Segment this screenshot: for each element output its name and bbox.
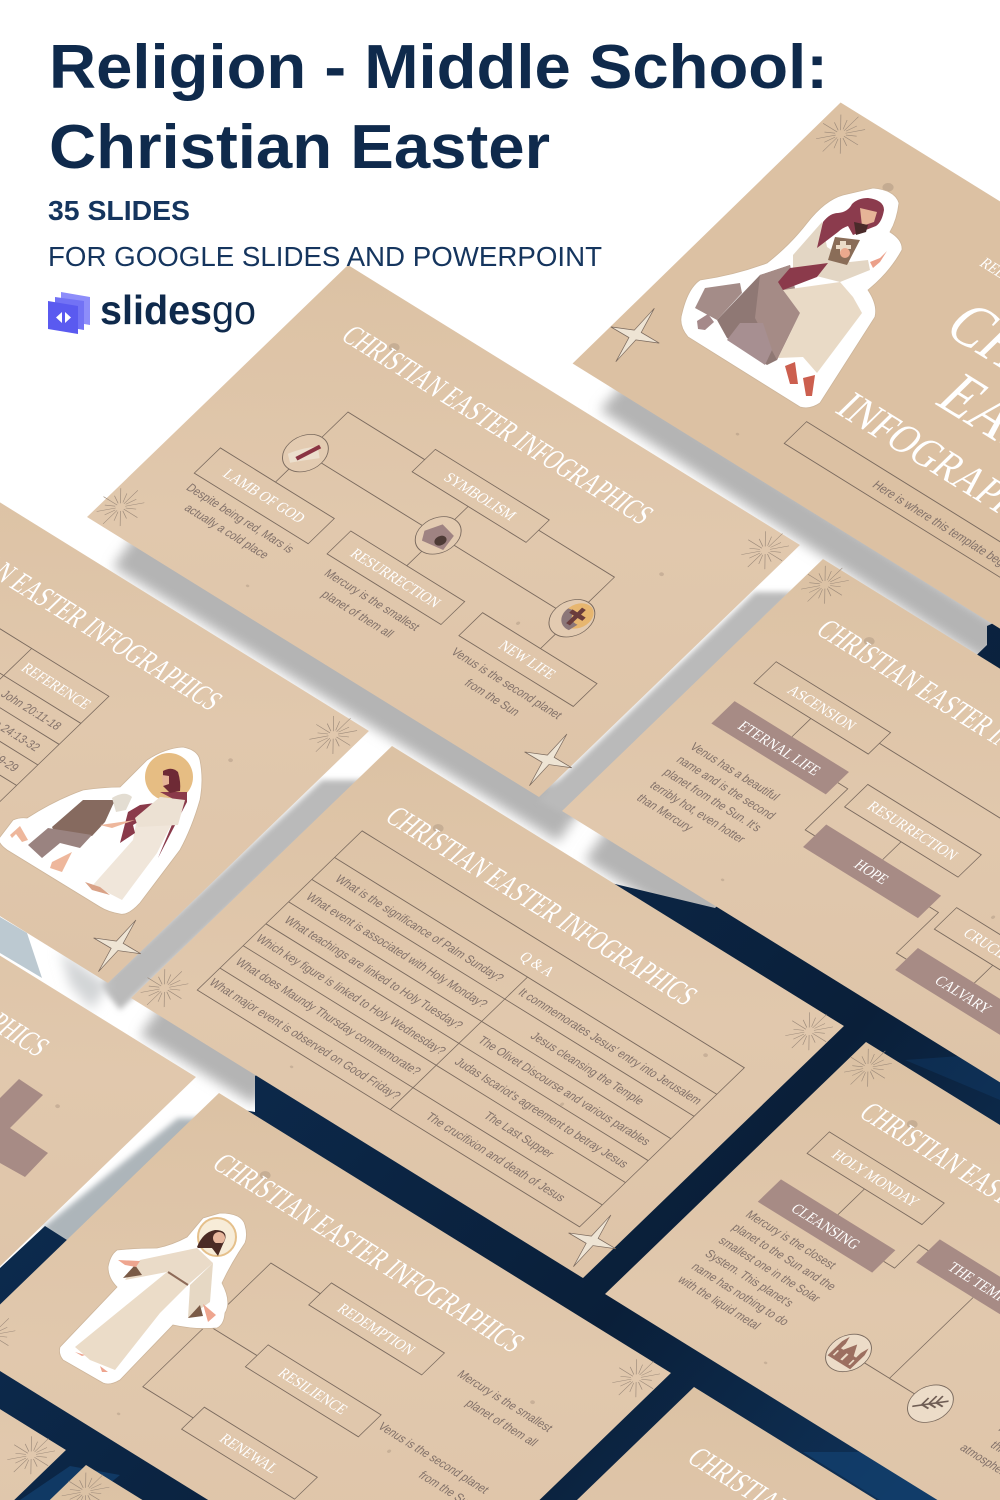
text: resilience: Venus is the second planet: [375, 1420, 492, 1497]
node: renewal: [182, 1407, 317, 1499]
title: CHRISTIAN EASTER INFOGRAPHICS: [334, 320, 661, 531]
table: The Olivet Discourse and various parables: [475, 1034, 653, 1148]
table: Which key figure is linked to Holy Wednesday?: [253, 932, 449, 1058]
text: eternal life: Venus has a beautiful: [687, 740, 782, 803]
title: Religion - Middle School:: [49, 33, 828, 102]
title: CHRISTIAN EASTER INFOGRAPHICS: [205, 1148, 532, 1359]
connectors: [274, 412, 614, 649]
sunburst: [86, 480, 155, 534]
text: lamb of god: actually a cold place: [181, 502, 272, 561]
text: cleansing: smallest one in the Solar: [715, 1234, 823, 1305]
text: cleansing: planet to the Sun and the: [729, 1221, 839, 1293]
sunburst: [602, 1351, 671, 1406]
icon: slidesgo logo: [48, 292, 90, 334]
text: lamb of god: Despite being red, Mars is: [183, 481, 297, 556]
slide: ascension tree: [562, 557, 1000, 1091]
node: resurrection: RESURRECTION: [346, 546, 444, 611]
slide: cover: [568, 100, 1000, 651]
cover text box: [784, 422, 1000, 611]
text: eternal life: name and is the second: [673, 754, 778, 822]
sticker: Jesus seated on rock: [681, 188, 902, 408]
node: symbolism: SYMBOLISM: [440, 470, 519, 524]
text: cleansing: [674, 1208, 852, 1345]
sunburst: [130, 961, 199, 1015]
slide: redemption tree: [0, 1091, 671, 1500]
text: eternal life: [634, 740, 792, 860]
star: [540, 1199, 644, 1283]
connectors: [755, 1189, 1000, 1394]
sunburst: [0, 1308, 26, 1362]
title: CHRISTIAN EASTER INFOGRAPHICS: [378, 801, 705, 1012]
table: What major event is observed on Good Friday?: [206, 976, 404, 1102]
sunburst: [731, 523, 800, 578]
connectors: [143, 1263, 321, 1418]
table: Judas Iscariot's agreement to betray Jesus: [451, 1056, 631, 1171]
text: cleansing: Mercury is the closest: [742, 1208, 840, 1272]
node: redemption: REDEMPTION: [333, 1301, 419, 1359]
text: eternal life: than Mercury: [634, 792, 696, 834]
icon: scroll: [273, 427, 338, 479]
table: What event is associated with Holy Monday?: [303, 891, 491, 1011]
big filled shape on left slide: [0, 1079, 48, 1177]
slide: reference table: [0, 450, 376, 988]
node: ascension: [754, 662, 891, 754]
sunburst: [805, 106, 876, 162]
cover title: [827, 281, 1000, 582]
sunburst: [775, 1004, 844, 1059]
table: The Last Supper: [480, 1110, 557, 1160]
node: redemption: [309, 1283, 444, 1375]
table: REFERENCE: [17, 661, 94, 713]
node: hope: [803, 825, 941, 918]
text: redemption: Mercury is the smallest: [454, 1368, 556, 1435]
text: cleansing: System. This planet's: [702, 1247, 797, 1310]
table: [0, 549, 109, 806]
icon: church: [816, 1327, 881, 1379]
slide: far bottom left: [0, 1170, 66, 1500]
node: resilience: RESILIENCE: [274, 1366, 351, 1418]
node: cleansing: CLEANSING: [787, 1201, 864, 1253]
sunburst: [299, 708, 368, 762]
node: resurrection: [845, 784, 981, 877]
node: resilience: [245, 1345, 381, 1437]
node: lamb of god: [194, 448, 334, 544]
node: eternal life: [711, 701, 849, 794]
node: resurrection: RESURRECTION: [863, 799, 961, 864]
slide: bottom centre right: [433, 1387, 1000, 1500]
table: It commemorates Jesus' entry into Jerusalem: [515, 986, 705, 1107]
slide count: 35 SLIDES: [48, 195, 190, 226]
table: Q & A: [515, 949, 558, 980]
text: right column: [957, 1415, 1000, 1481]
text: cleansing: name has nothing to do: [688, 1261, 792, 1329]
node: holy monday: [807, 1132, 944, 1225]
star: [582, 292, 689, 378]
node: ascension: ASCENSION: [783, 683, 859, 734]
text: new life: from the Sun: [461, 677, 523, 718]
logo wordmark: slidesgo: [100, 287, 256, 333]
sticker: Jesus with open arms: [59, 1213, 246, 1384]
slide: tiny bottom left: [0, 1464, 538, 1500]
text: resurrection: planet of them all: [318, 588, 396, 640]
icon: cross: [539, 592, 604, 644]
subtitle: FOR GOOGLE SLIDES AND POWERPOINT: [48, 241, 602, 272]
navy background region: [0, 620, 1000, 1500]
node: cleansing: [758, 1179, 895, 1273]
title line two: Christian Easter: [49, 113, 550, 182]
node: calvary: CALVARY: [931, 973, 995, 1017]
node: new life: [459, 613, 597, 706]
text: eternal life: terribly hot, even hotter: [647, 779, 748, 846]
node: resurrection: [327, 531, 465, 624]
node: holy monday: HOLY MONDAY: [827, 1147, 923, 1211]
sunburst: [834, 1040, 902, 1095]
icon: palm leaf: [898, 1378, 963, 1429]
star: [496, 718, 600, 802]
table: The crucifixion and death of Jesus: [422, 1110, 568, 1204]
table: What does Maundy Thursday commemorate?: [232, 956, 424, 1078]
table: [197, 831, 744, 1227]
node: crucifixion: [934, 908, 1000, 1000]
icon: tomb: [406, 510, 471, 561]
node: calvary: [895, 948, 1000, 1041]
text: new life: Venus is the second planet: [448, 646, 566, 722]
table: Jesus cleansing the Temple: [527, 1030, 647, 1108]
node: lamb of god: LAMB OF GOD: [219, 467, 309, 527]
node: the temple: [916, 1239, 1000, 1333]
star: [65, 904, 169, 988]
connectors: [696, 708, 1000, 1028]
sticker: Jesus healing kneeling man: [0, 747, 202, 914]
text: eternal life: planet from the Sun. It's: [660, 766, 765, 834]
node: eternal life: ETERNAL LIFE: [734, 719, 824, 779]
node: symbolism: [412, 449, 549, 542]
node: new life: NEW LIFE: [494, 638, 559, 683]
slide: q and a table: [127, 744, 851, 1283]
navy highlight swooshes: [20, 1056, 1000, 1500]
shadow bands between slides: [0, 382, 1000, 1248]
text: redemption: planet of them all: [462, 1397, 541, 1449]
table: What teachings are linked to Holy Tuesday?: [281, 914, 466, 1032]
node: renewal: RENEWAL: [215, 1431, 282, 1477]
table: What is the significance of Palm Sunday?: [332, 873, 507, 985]
sunburst: [791, 557, 859, 612]
text: cleansing: with the liquid metal: [674, 1273, 763, 1332]
slide: holy monday tree: [605, 1040, 1000, 1500]
slide: symbolism tree: [83, 263, 807, 802]
slide: left with large shape: [0, 797, 196, 1329]
text: resurrection: Mercury is the smallest: [321, 567, 423, 634]
node: hope: HOPE: [850, 857, 892, 888]
